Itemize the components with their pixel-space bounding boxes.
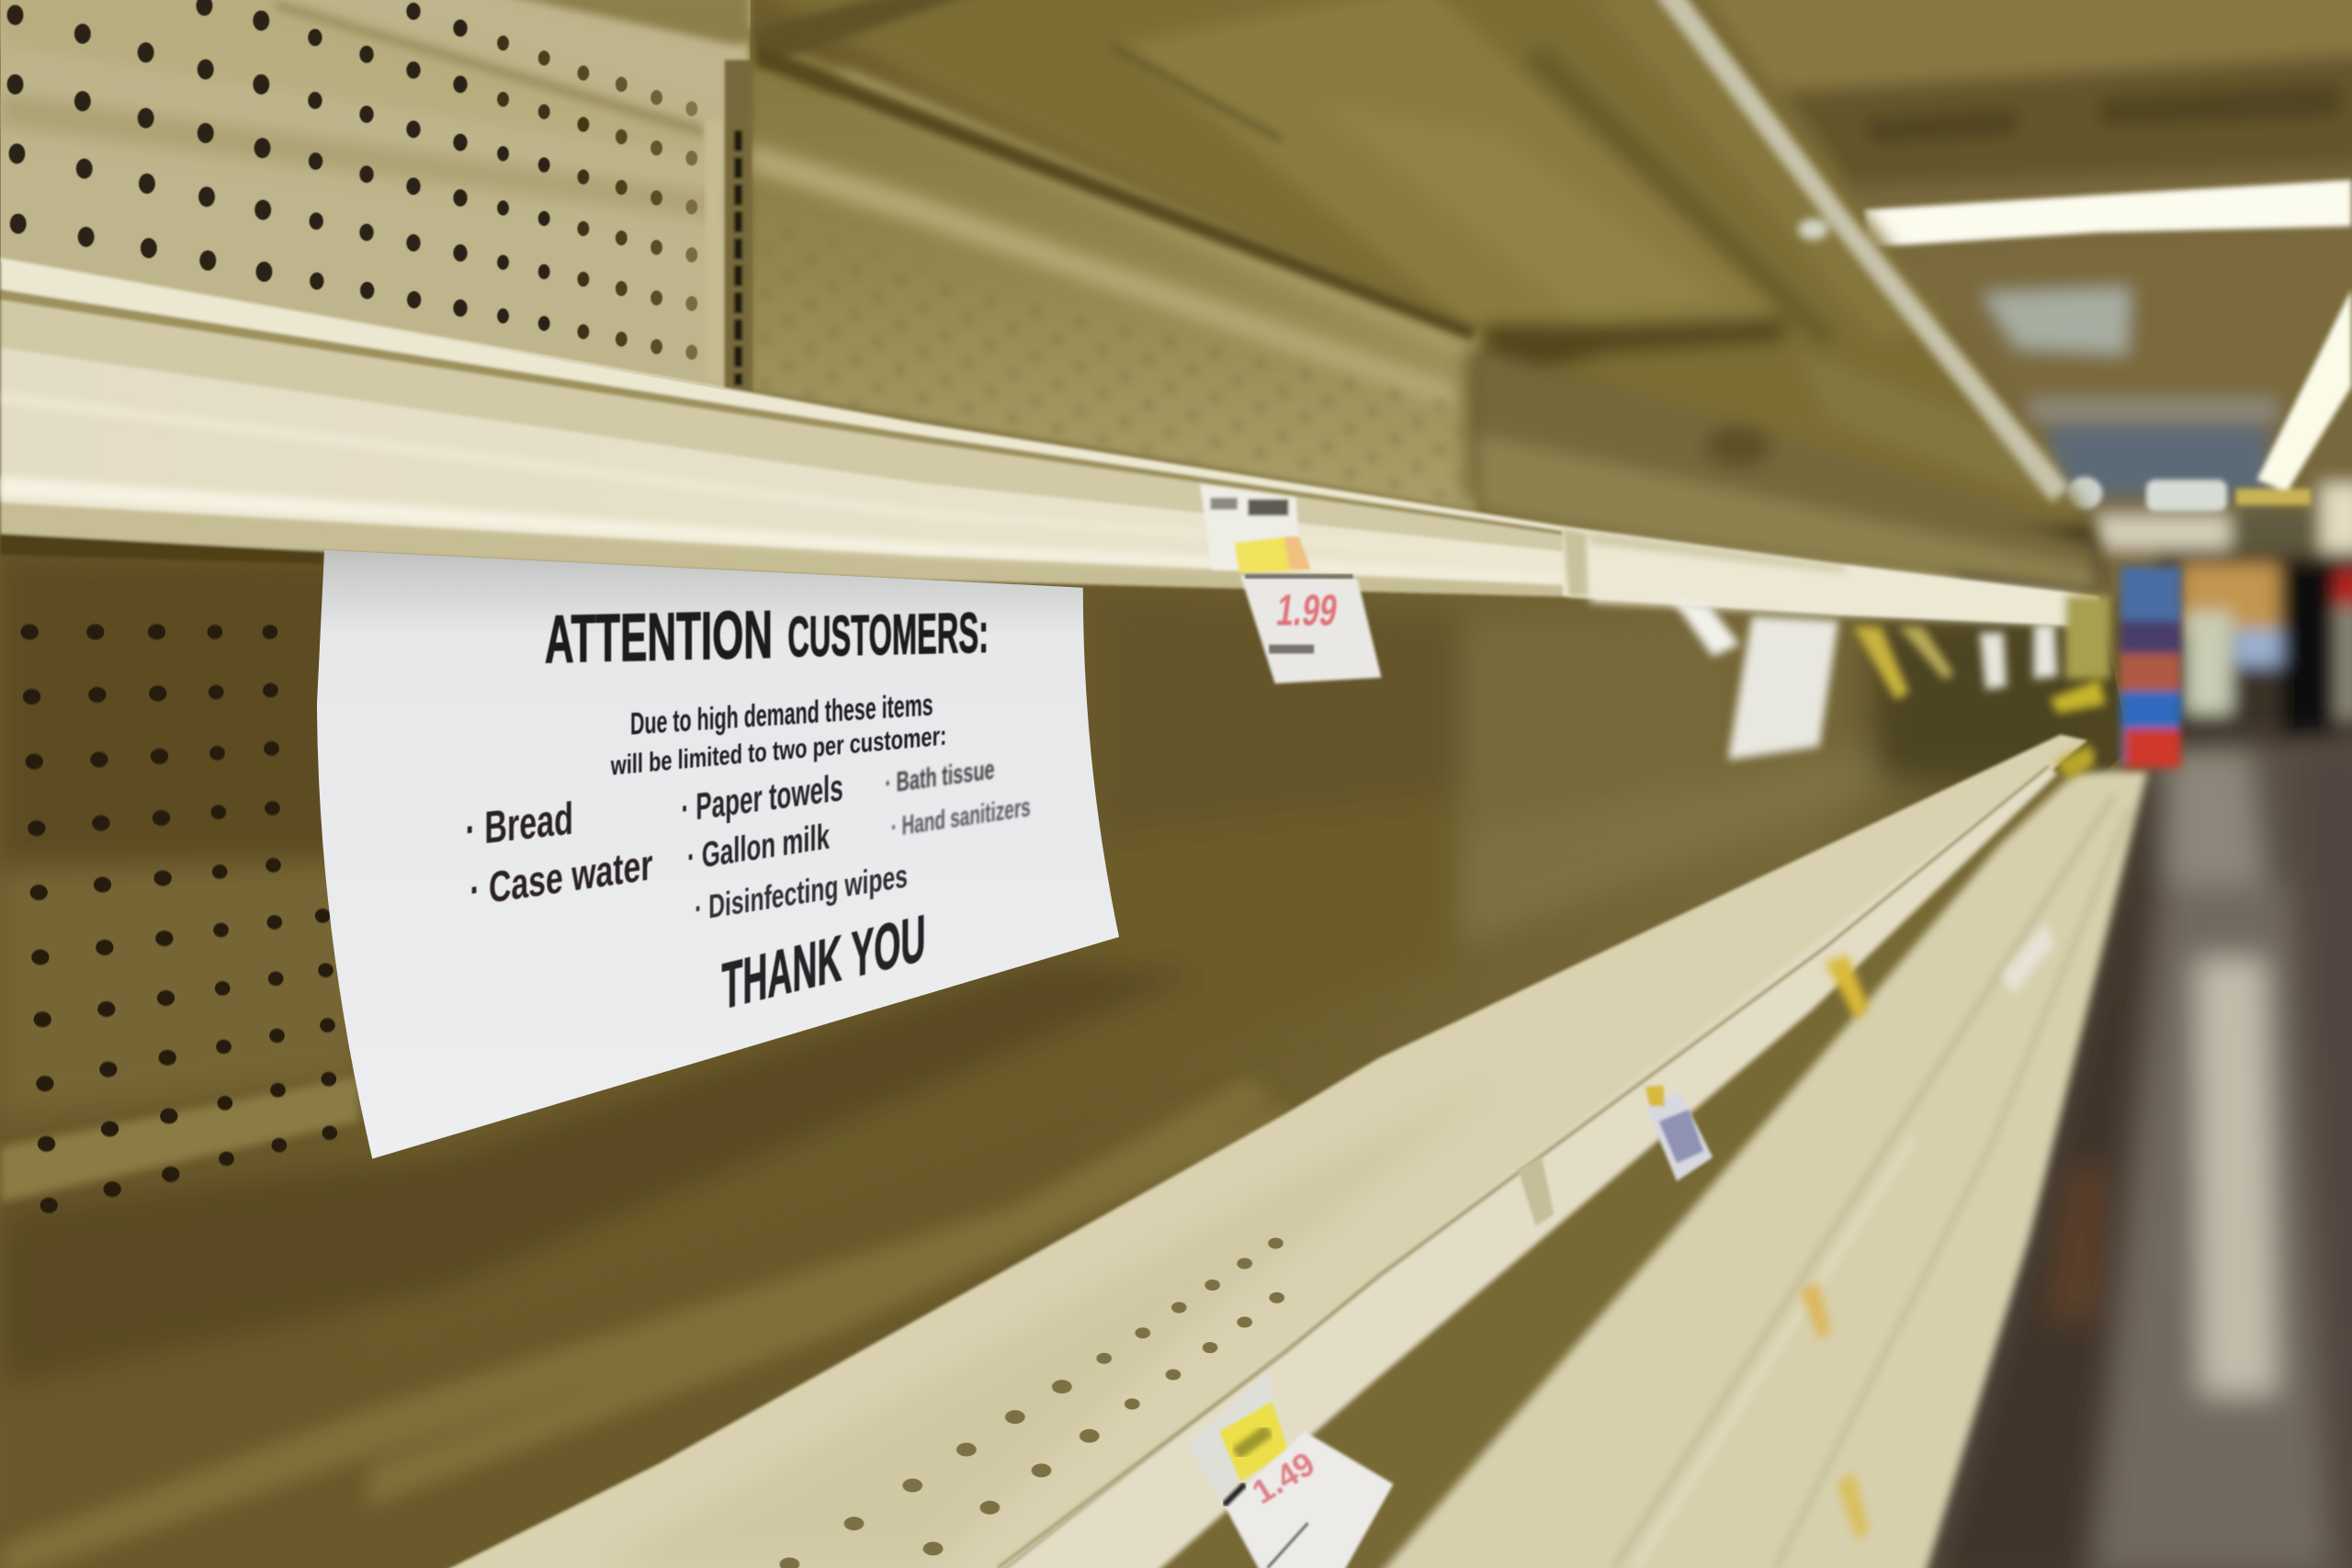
thin seam under the shelf plate [1112,47,1281,140]
under-shelf shadow [1,534,322,564]
list item: disinfecting wipes: · Disinfecting wipes [695,857,908,928]
list item: paper towels: · Paper towels [681,766,843,829]
shelf post [725,60,752,393]
lower wall peg holes [21,624,337,1213]
third shelf [1377,771,2147,1568]
shelf inner channel [1,299,1563,552]
second shelf [438,735,2087,1568]
lower price tag with yellow sticker: 1.49 [1246,1445,1321,1511]
sign: attention customers notice [317,550,1119,1158]
shelf rod [1,258,1563,534]
list item: gallon milk: · Gallon milk [687,817,830,877]
lower wall diagonal streaks [1,1079,1293,1568]
dark gap between lower shelves [1148,750,2099,1568]
list item: bath tissue: · Bath tissue [885,753,995,799]
shelf section connector [1563,527,1589,597]
blurred far tags [1672,600,2106,1541]
upper barcode price tag [1200,484,1311,572]
shelf highlights [1,393,1563,581]
list item: hand sanitizers: · Hand sanitizers [891,792,1031,843]
lower back wall [1,525,2130,1568]
rod groove [1,289,1563,536]
lower wall highlight streak [1,1077,359,1202]
second shelf peg holes [780,1238,1284,1568]
sign thank you: THANK YOU [722,902,925,1023]
lower wall light bands [1,555,2099,1387]
floor with reflections [1905,735,2352,1568]
lower price tag with yellow sticker [1188,1371,1394,1568]
shelf tag: blue and white [1645,1086,1713,1181]
second wall panel [751,0,1477,513]
sign intro line two: will be limited to two per customer: [610,720,946,782]
upper wall peg holes [7,0,697,360]
sign heading: customers: CUSTOMERS: [787,602,989,670]
ceiling lights [1864,180,2351,511]
upper price tag: 1.99 [1273,587,1340,635]
list item: bread: · Bread [465,794,573,855]
shelf highlight rod [1653,0,2070,502]
upper price tag [1240,574,1382,683]
far end of top shelf [1589,534,2110,679]
underside of top shelf [751,0,2099,592]
ceiling and far end of the store [1620,0,2352,761]
sign heading: attention: ATTENTION [545,597,773,677]
upper pegboard wall [1,0,751,393]
end-of-aisle display [2120,567,2180,768]
sign intro line one: Due to high demand these items [630,687,933,742]
top shelf front face [1,258,2099,626]
list item: case water: · Case water [469,840,652,916]
shelf lower trim [1,502,1563,597]
right wall panel [1465,348,2099,597]
